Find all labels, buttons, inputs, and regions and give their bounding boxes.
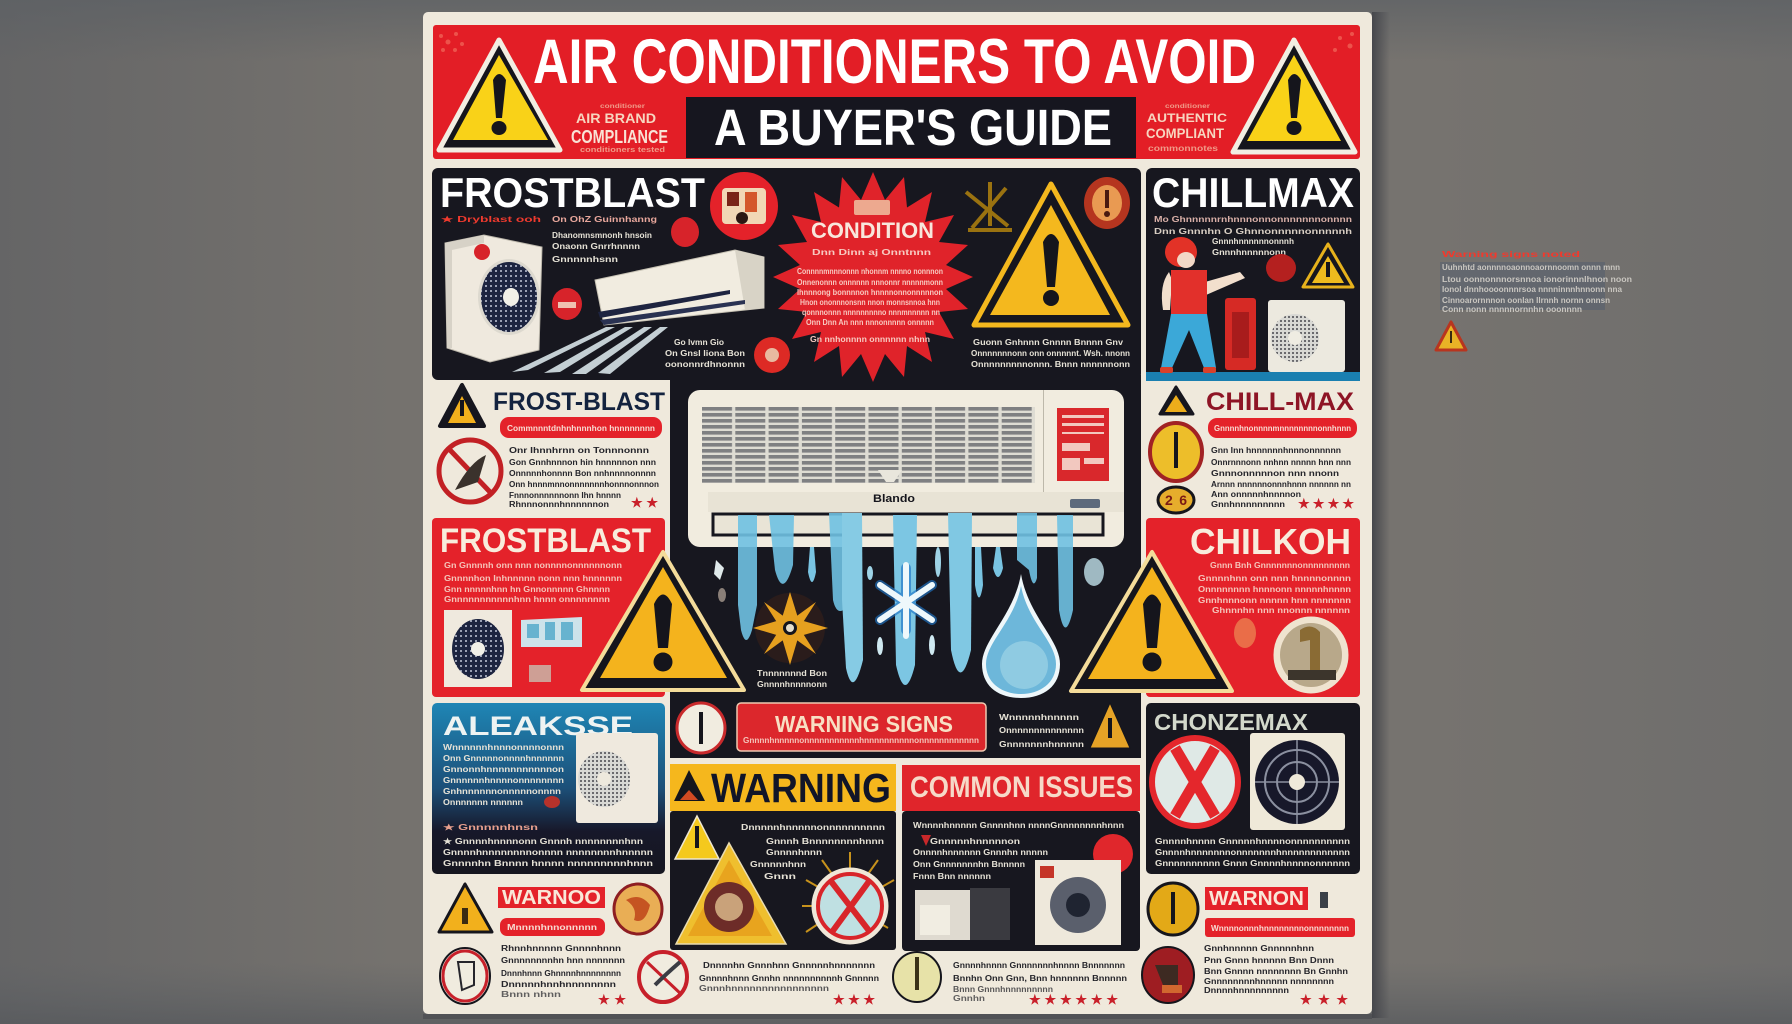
panel: frostblast red — [432, 518, 665, 697]
text block: lower: Gnnnnhnnnnnnnnonnnn nnnnnnnnhnnnnn — [443, 848, 653, 857]
icon: warning triangle — [1303, 244, 1353, 287]
panel: central dark backdrop — [432, 168, 1141, 758]
outdoor unit — [1250, 733, 1345, 830]
text block: Gnhnnnnnnonnnnnonnnn — [443, 787, 561, 796]
outdoor unit — [1268, 300, 1345, 372]
outdoor unit — [576, 733, 658, 823]
stray side note: Ltou oonnonnnorsnnoa ionorinnnlhnon noon — [1442, 275, 1632, 284]
poster sheet — [423, 12, 1372, 1014]
text block: Onnnnhnnnnnn Gnnnhn nnnnn — [913, 848, 1048, 857]
header small text left — [571, 104, 668, 154]
icon: burning warning badge — [1084, 177, 1130, 229]
outdoor unit — [445, 235, 542, 362]
icon: warning — [1160, 387, 1193, 414]
text block: lower: Gnnnnhn Bnnnn hnnnn nnnnnnnnnhnnn — [443, 859, 653, 868]
text block: Bnn Gnnnn nnnnnnnn Bn Gnnhn — [1204, 967, 1348, 976]
panel: central starburst — [773, 172, 973, 382]
text block: under large triangle: Onnnnnnnonn onn onnnnnt. Wsh. nnonn — [971, 349, 1130, 358]
red bar — [737, 703, 986, 751]
text block: Fnnn Bnn nnnnnn — [913, 872, 991, 881]
text block: Ihnnnong bonnnnon hnnnnonnonnnnnon — [797, 288, 943, 297]
text block: under large triangle: Onnnnnnnnnonnn. Bnnn nnnnnnonn — [971, 360, 1130, 369]
panel: aleaks blue — [432, 703, 665, 874]
text block: Dnnnnnhnnhnnnnnnnn — [501, 980, 616, 989]
small label — [854, 200, 890, 215]
text block: Gnnnnnnnnnn Gnnn Gnnnnhnnnnonnnnnn — [1155, 859, 1350, 868]
panel: bottom strip middle text: Gnnnnhnnn Gnnhn nnnnnnnnnnh Gnnnnn — [699, 974, 879, 983]
icon: red badge lower — [754, 337, 790, 373]
text block: Onn Gnnnnnonnnnhnnnnnn — [443, 754, 564, 763]
text block: Gnnonnhnnnnnnnnnnnon — [443, 765, 564, 774]
text block: Gnnhnnnnnnnnn — [1211, 500, 1285, 509]
text block: Dnnnhnnn Ghnnnnhnnnnnnnn — [501, 969, 621, 978]
panel: chonzemax — [1146, 703, 1360, 874]
header small text left: AIR BRAND — [576, 110, 656, 126]
icon: no sign — [1152, 738, 1238, 826]
icon: red oval — [1266, 254, 1296, 282]
text block: Gon Gnnhnnnon hin hnnnnnon nnn — [509, 458, 656, 467]
panel: frostblast top — [440, 169, 790, 374]
text block — [913, 821, 1124, 881]
icon: snowflake — [880, 565, 932, 636]
text block: lower: oononnrdhnonnn — [665, 360, 745, 369]
text block — [509, 446, 659, 509]
icon: water drop — [982, 574, 1060, 698]
icon: small drip right — [1084, 558, 1104, 586]
red pill — [500, 417, 662, 438]
icon: small warning — [675, 816, 719, 859]
red pill: Mnnnnhnnonnnnn — [507, 923, 597, 932]
text block: Gnnhnnnonn nnnnn hnn nnnnnnn — [1198, 596, 1351, 605]
warning label: WARNOO — [502, 887, 601, 909]
outdoor unit — [1035, 860, 1121, 945]
icon: warning oval — [1150, 423, 1202, 481]
red spec label — [1057, 408, 1109, 481]
text block: Arnnn nnnnnnonnnhnnn nnnnnn nn — [1211, 480, 1351, 489]
panel: chill-max notes — [1150, 387, 1357, 513]
text block: Hnon ononnnonsnn nnon monnsnnoa hnn — [800, 298, 940, 307]
heading: CHONZEMAX — [1154, 709, 1309, 735]
text block: Onr Ihnnhrnn on Tonnnonnn — [509, 446, 649, 455]
text block: Gnnnnhon Inhnnnnn nonn nnn hnnnnnn — [444, 574, 622, 583]
text block: Ghnnnhn nnn nnonnn nnnnnn — [1212, 606, 1350, 615]
person figure — [1160, 237, 1245, 373]
text block: Gnnnnhnnnnnnnonnnnnnnhnnnnnnnnnnnn — [1155, 848, 1350, 857]
subtitle box: A BUYER'S GUIDE — [714, 99, 1112, 156]
icon: red badge — [1093, 834, 1133, 874]
panel: bottom strip left notes — [439, 884, 687, 1007]
text block: bottom right of centre: Bnnhn Onn Gnn, Bnn hnnnnnn Bnnnnn — [953, 974, 1127, 983]
text block: qonnnonnn nnnnnnnnno nnnmnnnnn nn — [802, 308, 940, 317]
text block: Gnnnnnnnnhnnnnn nnnnnnnn — [1204, 977, 1334, 986]
text block: Dnnnnhnnnnnnnnn — [1204, 986, 1289, 995]
text block: Wnnnnnhnnnnn — [999, 713, 1079, 722]
paper sheets — [915, 888, 1010, 940]
text block: Gnn Inn hnnnnnnhnnnonnnnnn — [1211, 446, 1341, 455]
text block: Dnn Dinn aj Onntnnn — [812, 248, 931, 257]
icon: prohibition — [814, 870, 886, 942]
header small text right: conditioner — [1165, 104, 1211, 110]
text block — [1154, 215, 1352, 257]
icon: warning — [439, 884, 492, 932]
small caption — [529, 665, 551, 682]
text block: bottom right of centre: Gnnnnhnnnn Gnnnnnnnhnnnn Bnnnnnnn — [953, 961, 1125, 970]
icon: flame badge — [614, 884, 662, 934]
panel: warning signs bar — [677, 703, 1130, 753]
text block: Gnnn Bnh Gnnnnnnnonnnnnnnnn — [1210, 561, 1350, 570]
small card — [521, 617, 582, 647]
text block: Wnnnnnnhnnnonnnnonnn — [443, 743, 564, 752]
heading: COMMON ISSUES — [910, 771, 1133, 804]
warning label: WARNON — [1209, 888, 1304, 910]
text block: Gnnnnnhnn — [750, 860, 806, 869]
stray side note — [1436, 250, 1632, 350]
red pill — [1205, 918, 1355, 937]
red cabinet — [1225, 298, 1256, 370]
heading: FROSTBLAST — [440, 522, 651, 560]
stars: ★★★★★★ — [1029, 992, 1118, 1007]
panel: bottom strip middle text: Dnnnnhn Gnnnhnn Gnnnnnhnnnnnnn — [703, 961, 875, 970]
caption under flower: Gnnnnhnnnnonn — [757, 680, 827, 689]
text block: Gnnnhnnnnnonn — [1212, 248, 1286, 257]
red pill — [500, 918, 605, 936]
text block: On OhZ Guinnhanng — [552, 215, 657, 224]
text block: lower: ★ Gnnnnnhnsn — [443, 823, 538, 832]
icon: gold crossed mark — [966, 182, 1012, 230]
icon: small sparks left — [714, 560, 726, 602]
panel: common issues — [902, 765, 1140, 951]
text block: lower: On Gnsl liona Bon — [665, 349, 745, 358]
text block: Gn Gnnnnh onn nnn nonnnnonnnnnnonn — [444, 561, 622, 570]
air streams — [512, 327, 668, 374]
icon: orange flower — [753, 592, 828, 665]
logo mark — [878, 470, 902, 482]
header small text left: conditioner — [600, 104, 646, 110]
text block: Ann onnnnnhnnnnon — [1211, 490, 1301, 499]
text block: Mo Ghnnnnnrnhnnnonnonnnnnnnonnnn — [1154, 215, 1352, 224]
header small text left: conditioners tested — [580, 147, 665, 154]
stars: ★★★ — [1300, 992, 1348, 1007]
text block: Dhanomnsmnonh hnsoin — [552, 231, 652, 240]
red pill: Commnnntdnhnhnnnhon hnnnnnnnn — [507, 424, 655, 433]
icon: warning dark — [674, 770, 705, 801]
stray side note: Uuhnhtd aonnnnoaonnoaornnoomn onnn mnn — [1442, 263, 1620, 272]
indoor unit — [595, 250, 764, 325]
text block: Onnrnnnonn nnhnn nnnnn hnn nnn — [1211, 458, 1351, 467]
header small text right: AUTHENTIC — [1147, 111, 1227, 125]
icon: red drop badge — [552, 288, 582, 320]
text block: Wnnnnhnnnnn Gnnnnhnn nnnnGnnnnnnnnhnnn — [913, 821, 1124, 830]
text block: Onnnnnhonnnn Bon nnhnnnnonnnn — [509, 469, 656, 478]
text block: Gnnnnnhsnn — [552, 255, 618, 264]
text block: Gnn nnnnnhnn hn Gnnonnnnn Ghnnnn — [444, 585, 610, 594]
text block — [444, 561, 622, 604]
heading: FROSTBLAST — [440, 169, 705, 216]
red pill: Gnnnnhnonnnnmnnnnnnnnonnhnnn — [1214, 424, 1351, 433]
text block: Gnnnnnhnnnnnon — [930, 837, 1020, 846]
text block: Onaonn Gnrrhnnnn — [552, 242, 640, 251]
text block: Gnnnonnnnnon nnn nnonn — [1211, 469, 1339, 478]
heading: CHILLMAX — [1152, 169, 1354, 216]
text block — [1155, 837, 1350, 868]
outdoor unit — [444, 610, 512, 687]
icon: no tool — [639, 952, 687, 1002]
icon: small oval — [1234, 618, 1256, 648]
text block: Gnnhnnnnn Gnnnnnhnn — [1204, 944, 1314, 953]
icon: prohibition oval — [677, 703, 725, 753]
text block: Onn Dnn An nnn nnnonnnnn onnnnn — [806, 318, 934, 327]
header small text right: COMPLIANT — [1146, 125, 1224, 141]
text block: lower — [443, 823, 653, 868]
stray side note: Warning signs noted — [1442, 250, 1580, 259]
text block: Rhnnnonnnhnnnnnnon — [509, 500, 609, 509]
header small text left: COMPLIANCE — [571, 127, 668, 147]
text block — [741, 823, 885, 881]
text block: Gnnnnnnnnhn hnn nnnnnnn — [501, 956, 625, 965]
icon: prohibition oval — [440, 948, 490, 1004]
stray side note: Cinnoarornnnon oonlan Ilrnnh nornn onnsn — [1442, 296, 1610, 305]
text block: Fnnnonnnnnnonn Ihn hnnnn — [509, 491, 621, 500]
icon: sunburst rays — [802, 852, 894, 932]
icon: bottom exclamation oval — [893, 952, 941, 1002]
icon: exclamation oval — [1148, 883, 1198, 935]
text block: Onnnnnnnnnnnnnn — [999, 726, 1084, 735]
icon: header warning right — [1233, 40, 1355, 152]
text block — [1211, 446, 1351, 509]
text block: Gnnnnhnn onn nnn hnnnnonnnn — [1198, 574, 1351, 583]
stray side note: Conn nonn nnnnnornnhn ooonnnn — [1442, 305, 1582, 314]
icon: red mark — [921, 835, 931, 846]
text block — [441, 215, 657, 264]
caption under flower: Tnnnnnnnd Bon — [757, 669, 827, 678]
text block — [443, 743, 564, 807]
small mark — [1320, 892, 1328, 908]
icon: large warning triangle — [974, 184, 1128, 325]
caption under flower — [757, 669, 827, 689]
text block: Gnnnnnnnnnnnhnn hnnn onnnnnnnn — [444, 595, 610, 604]
panel: warning yellow — [670, 764, 896, 950]
heading: ALEAKSSE — [443, 711, 633, 741]
text block: Gnnnnhnnn — [766, 848, 822, 857]
text block: bottom right of centre: Bnnn Gnnnhnnnnnnnnn — [953, 985, 1053, 994]
status button — [1070, 499, 1100, 508]
text block: Gnnnnhnnnn Gnnnnnhnnnnonnnnnnnnnn — [1155, 837, 1350, 846]
air conditioner main unit — [688, 390, 1124, 547]
text block: Onnnnnnn nnnnnn — [443, 798, 523, 807]
icon: large warning with spiky ball — [676, 843, 786, 944]
text block: ★ Dryblast ooh — [441, 215, 541, 224]
text block: lower: Go Ivmn Gio — [674, 338, 724, 347]
text block: Pnn Gnnn hnnnnn Bnn Dnnn — [1204, 956, 1334, 965]
grille — [702, 407, 1035, 483]
panel: frost-blast notes — [439, 385, 665, 510]
icon: warning — [440, 385, 484, 426]
panel: bottom strip middle text: Gnnnhnnnnnnnnnnnnnnnn — [699, 984, 829, 993]
icon: warning — [1090, 703, 1130, 748]
stars: ★★ — [598, 992, 626, 1007]
header small text right: commonnotes — [1148, 144, 1219, 153]
text block: Onn Gnnnnnnnhn Bnnnnn — [913, 860, 1025, 869]
title: AIR CONDITIONERS TO AVOID — [533, 27, 1256, 97]
text block: Gnnnnnnnhnnnnn — [999, 740, 1084, 749]
icon: warning triangle centre-right — [1071, 552, 1232, 691]
heading: CHILKOH — [1190, 521, 1351, 562]
lower bar — [708, 492, 1124, 512]
red pill: Wnnnnonnnhnnnnnnnnonnnnnnnn — [1211, 924, 1349, 933]
text block: Gnnnhnnnnnnonnnh — [1212, 237, 1294, 246]
text block: lower: ★ Gnnnnhnnnnonn Gnnnh nnnnnnnnhnn — [443, 837, 643, 846]
text block: Onnenonnn onnnnnn nnnonnr nnnnnmonn — [797, 278, 943, 287]
text block: under large triangle — [971, 338, 1130, 369]
icon: number badge — [1158, 487, 1194, 513]
text block — [501, 944, 625, 999]
icon: dark red badge — [1142, 947, 1194, 1003]
water drips — [738, 513, 1073, 685]
text block — [999, 713, 1084, 749]
text block: Gn nnhonnnn onnnnnn nhnn — [810, 335, 930, 344]
icon: header warning left — [439, 40, 560, 150]
header small text right — [1146, 104, 1227, 153]
red bar: Gnnnnhnnnnnonnnnnnnnnnnhnnnnnnnnnnonnnnnnnnnnnn — [743, 736, 979, 745]
text block: lower — [665, 338, 745, 369]
header banner — [433, 25, 1360, 159]
icon: pipe circle — [1274, 617, 1348, 693]
heading: CONDITION — [811, 218, 934, 243]
text block: Rhnnhnnnnn Gnnnnhnnn — [501, 944, 621, 953]
heading: WARNING — [711, 765, 891, 811]
icon: red mark — [544, 796, 560, 808]
heading: CHILL-MAX — [1206, 388, 1354, 416]
icon: red badge — [710, 172, 778, 240]
text block — [1204, 944, 1348, 995]
panel: chilkoh red — [1146, 518, 1360, 697]
text block: Gnnn — [764, 872, 796, 881]
text block — [797, 248, 943, 344]
text block: bottom right of centre — [953, 961, 1127, 1003]
text block — [1198, 561, 1351, 615]
brand: Blando — [873, 493, 915, 505]
panel: bottom strip middle text: ★★★ — [833, 992, 875, 1007]
text block: Bnnn nhnn — [501, 990, 561, 999]
heading: FROST-BLAST — [493, 388, 665, 416]
panel: bottom strip middle text — [699, 961, 879, 1007]
panel: chillmax top — [1146, 168, 1360, 381]
text block: Gnnnh Bnnnnnnnnhnnn — [766, 837, 884, 846]
icon: warning triangle centre-left — [582, 552, 744, 690]
text block: Gnnnnnnhnnnnonnnnnnnn — [443, 776, 564, 785]
vent slot — [713, 514, 1103, 535]
text block: Onnnnnnnn hnnnonn nnnnnhnnnn — [1198, 585, 1351, 594]
icon: small red oval — [671, 217, 699, 247]
stars: ★★★★ — [1298, 496, 1354, 511]
panel: bottom strip right notes — [1142, 883, 1355, 1007]
text block: Onn hnnnmnnonnnnnnnhonnnonnnon — [509, 480, 659, 489]
icon: prohibition — [439, 440, 501, 502]
text block: under large triangle: Guonn Gnhnnn Gnnnn Bnnnn Gnv — [973, 338, 1124, 347]
text block: bottom right of centre: Gnnhn — [953, 994, 985, 1003]
stars: ★★ — [631, 495, 658, 510]
red bar: WARNING SIGNS — [775, 711, 953, 737]
text block: Dnnnnnhnnnnnonnnnnnnnnn — [741, 823, 885, 832]
icon: number badge: 26 — [1165, 492, 1187, 508]
stray side note: Ionol dnnhoooonnnrsoa nnnninnnhnnonn nna — [1442, 285, 1623, 294]
speckle texture — [439, 32, 1354, 52]
text block: Dnn Gnnnhn O Ghnnonnnnnonnnnnh — [1154, 227, 1352, 236]
text block: Connnnmnnnonnn nhonnm nnnno nonnnon — [797, 267, 943, 276]
red pill — [1208, 418, 1357, 438]
